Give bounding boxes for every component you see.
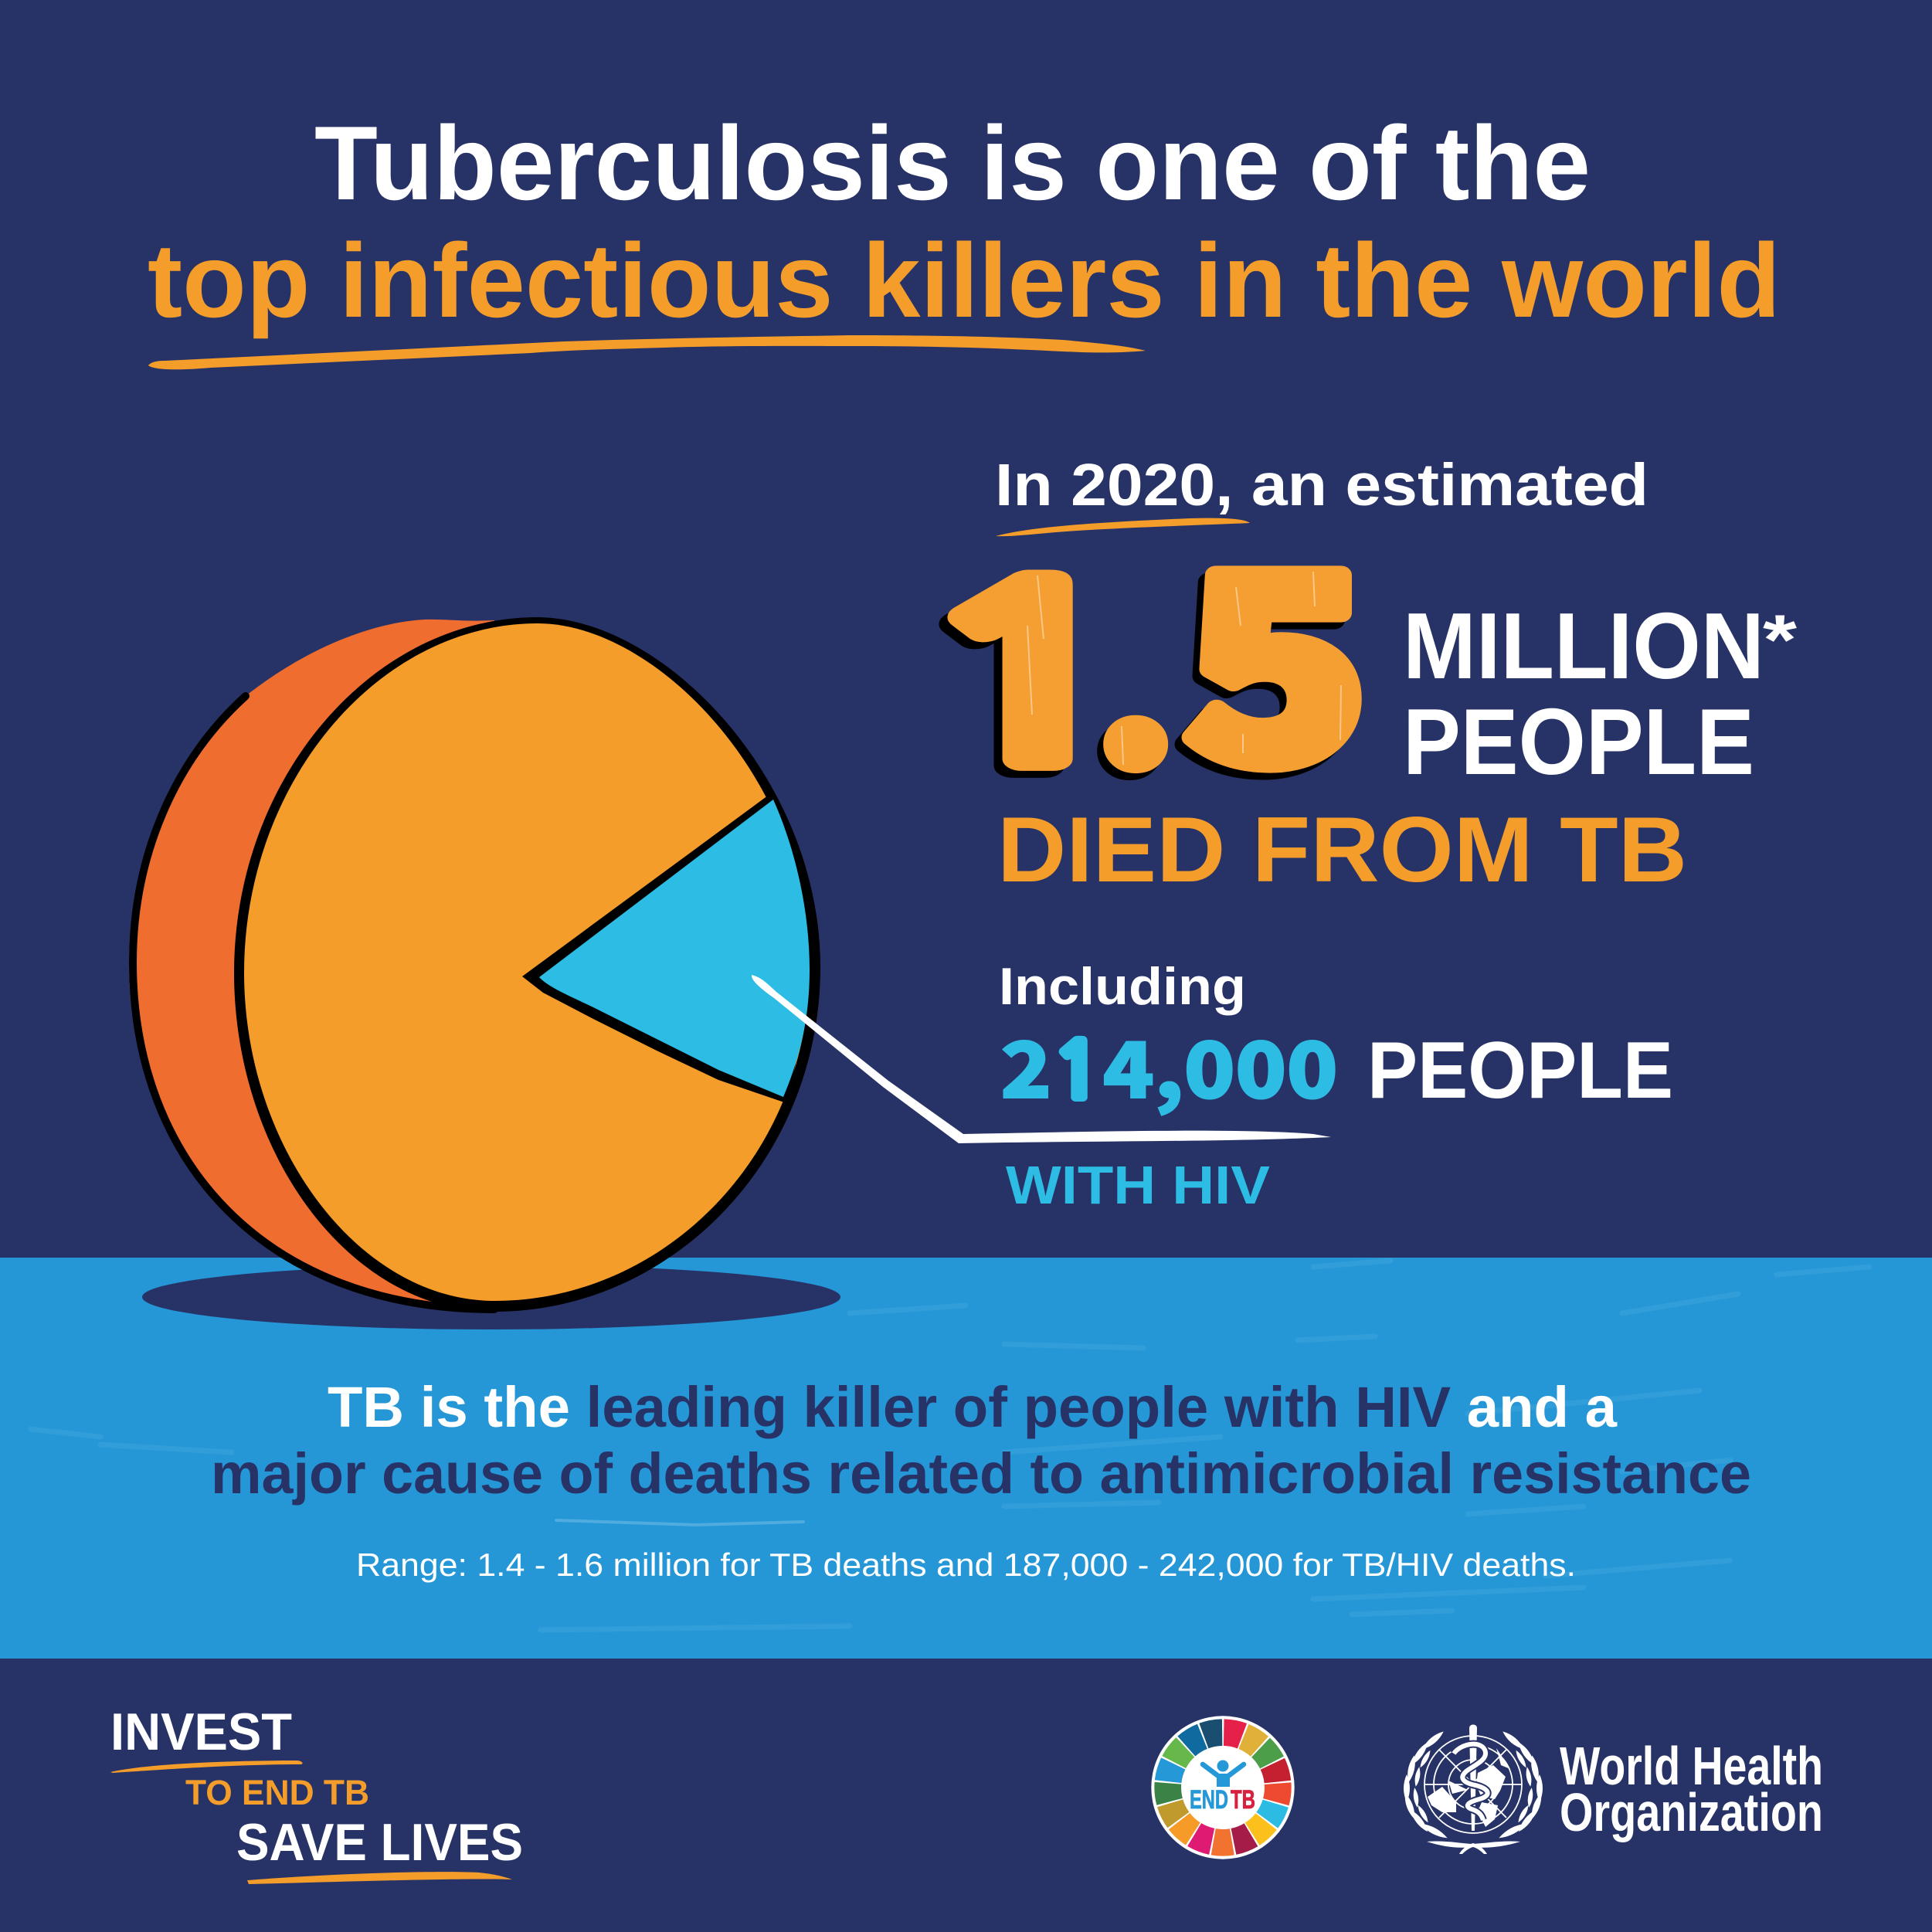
number: 214,000: 214,000 xyxy=(1000,1008,1338,1120)
logo: End TB: END xyxy=(1190,1785,1228,1815)
statement xyxy=(211,1375,1751,1506)
text: World Health Organization: Organization xyxy=(1560,1782,1823,1842)
pie chart xyxy=(129,617,820,1312)
title: Tuberculosis is one of the xyxy=(314,104,1591,222)
text: people: PEOPLE xyxy=(1403,689,1754,794)
big number: 1.5: . xyxy=(1083,509,1176,840)
statement: TB is the leading killer of people with HIV and a xyxy=(328,1375,1618,1439)
campaign slogan: TO END TB xyxy=(185,1773,369,1812)
text: people: PEOPLE xyxy=(1367,1026,1673,1115)
logo: End TB: TB xyxy=(1231,1785,1255,1815)
big number: 1.5 xyxy=(905,465,1367,841)
logo: WHO emblem xyxy=(1402,1724,1544,1854)
footnote: Range: 1.4 - 1.6 million for TB deaths and 187,000 - 242,000 for TB/HIV deaths. xyxy=(356,1547,1576,1583)
big number: 1.5: 5 xyxy=(1185,465,1367,834)
pie side outline xyxy=(133,696,494,1309)
text: in 2020: In 2020, an estimated xyxy=(995,452,1648,518)
big number: 1.5: 5 xyxy=(1178,472,1360,841)
pie shadow xyxy=(142,1265,840,1329)
text: World Health Organization xyxy=(1560,1736,1823,1842)
wedge: TB deaths with HIV xyxy=(539,800,810,1097)
campaign slogan: INVEST xyxy=(110,1703,292,1761)
big number: 1.5: 1 xyxy=(905,566,1136,804)
text: million: MILLION xyxy=(1403,593,1764,698)
panel: blue band xyxy=(0,1258,1932,1659)
pie side wall xyxy=(129,620,494,1312)
leader line xyxy=(752,975,1331,1143)
title: top infectious killers in the world xyxy=(148,222,1781,339)
title xyxy=(148,104,1781,339)
underline: 2020 xyxy=(996,518,1250,536)
logo: End TB xyxy=(1145,1710,1301,1866)
text: World Health Organization: World Health xyxy=(1560,1736,1823,1796)
statement: major cause of deaths related to antimicrobial resistance xyxy=(211,1441,1751,1506)
text: died from TB: DIED FROM TB xyxy=(997,798,1687,901)
pie face outline xyxy=(234,617,820,1312)
asterisk: * xyxy=(1763,601,1797,680)
pie face xyxy=(244,623,810,1301)
text: including: Including xyxy=(999,957,1246,1016)
text: with HIV: WITH HIV xyxy=(1006,1155,1270,1215)
title underline xyxy=(148,335,1146,369)
big number: 1.5: 1 xyxy=(913,559,1145,797)
big number: 1.5: . xyxy=(1089,502,1182,833)
wedge outline xyxy=(522,791,819,1103)
campaign slogan: SAVE LIVES xyxy=(236,1813,523,1872)
campaign slogan xyxy=(110,1703,523,1884)
